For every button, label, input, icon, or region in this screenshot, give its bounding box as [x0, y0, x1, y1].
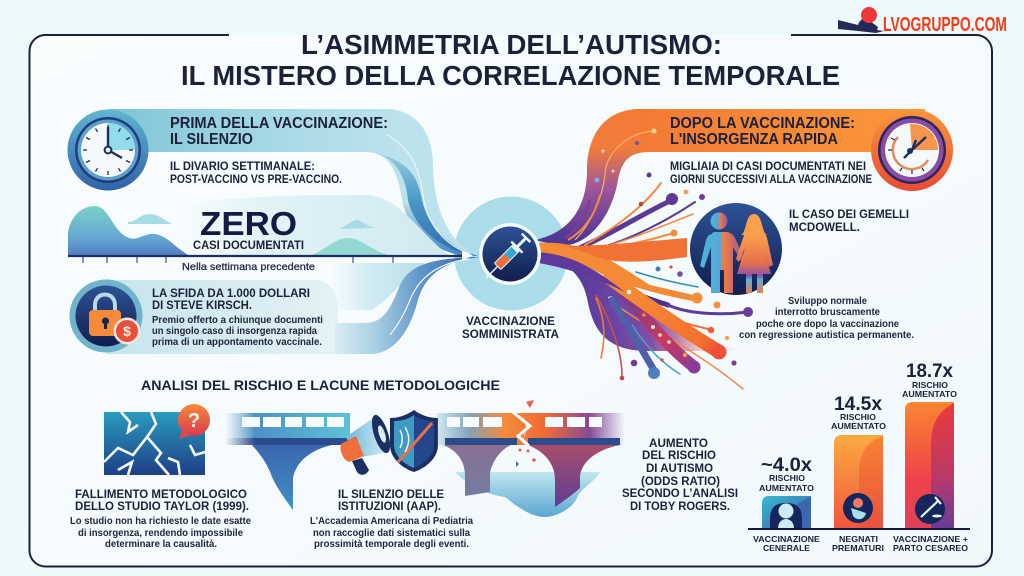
logo: ilvogruppo.com: [838, 7, 1007, 36]
thousands of cases text: MIGLIAIA DI CASI DOCUMENTATI NEI: [670, 161, 866, 173]
bar: general vaccination 4.0x: ~4.0x: [761, 455, 812, 476]
illustration: intact bridge: [225, 413, 350, 510]
text block: Taylor study: DELLO STUDIO TAYLOR (1999).: [75, 499, 249, 513]
bar: premature newborns 14.5x: AUMENTATO: [831, 421, 886, 431]
text block: risk increase: AUMENTO: [649, 436, 708, 450]
thousands of cases text: [670, 161, 872, 186]
bar: premature newborns 14.5x: RISCHIO: [840, 412, 876, 422]
icon: lock and dollar: $: [123, 323, 131, 339]
before heading: [170, 115, 388, 148]
text block: risk increase: SECONDO L’ANALISI: [622, 486, 738, 500]
bar category labels: VACCINAZIONE: [753, 534, 820, 544]
twins heading: MCDOWELL.: [789, 222, 860, 234]
challenge text: [152, 288, 323, 348]
text block: AAP silence: prossimità temporale degli eventi.: [314, 539, 469, 550]
icon: cracked study tile: ?: [188, 410, 200, 432]
before heading: PRIMA DELLA VACCINAZIONE:: [170, 115, 388, 132]
text block: Taylor study: di insorgenza, rendendo impossibile: [78, 528, 243, 539]
bar: vaccination plus caesarean 18.7x: RISCHIO: [912, 380, 948, 390]
text block: Taylor study: determinare la causalità.: [105, 539, 217, 550]
twins description: con regressione autistica permanente.: [739, 330, 914, 341]
zero cases figure: CASI DOCUMENTATI: [193, 238, 304, 252]
text block: AAP silence: L'Accademia Americana di Pediatria: [310, 516, 473, 527]
challenge text: un singolo caso di insorgenza rapida: [152, 326, 317, 337]
bar category labels: [753, 534, 968, 553]
bar category labels: PREMATURI: [832, 543, 884, 553]
after heading: DOPO LA VACCINAZIONE:: [670, 115, 855, 132]
weekly gap text: IL DIVARIO SETTIMANALE:: [170, 161, 315, 173]
twins heading: [789, 209, 909, 234]
bar: general vaccination 4.0x: [759, 455, 814, 529]
icon: McDowell twins: [690, 203, 782, 295]
weekly gap text: [170, 161, 342, 186]
vaccination label: [462, 316, 559, 341]
text block: risk increase: DEL RISCHIO: [642, 448, 716, 462]
panel: before vaccination stream: [108, 109, 478, 256]
bar chart: odds ratio: [748, 361, 970, 553]
bar: vaccination plus caesarean 18.7x: 18.7x: [906, 361, 953, 382]
bar category labels: VACCINAZIONE +: [893, 534, 968, 544]
challenge text: Premio offerto a chiunque documenti: [152, 315, 323, 326]
before heading: IL SILENZIO: [170, 131, 253, 148]
bar: general vaccination 4.0x: RISCHIO: [769, 473, 805, 483]
bar: premature newborns 14.5x: 14.5x: [834, 394, 882, 415]
text block: AAP silence: IL SILENZIO DELLE: [338, 487, 444, 501]
zero cases figure: Nella settimana precedente: [182, 261, 315, 273]
panel: after vaccination stream: [535, 109, 925, 246]
central vaccination node: [479, 223, 541, 285]
icon: lock and dollar: [70, 280, 142, 352]
text block: risk increase: (ODDS RATIO): [641, 474, 720, 488]
after heading: L'INSORGENZA RAPIDA: [670, 131, 838, 148]
illustration: broken bridge: [437, 400, 625, 517]
zero cases figure: [182, 205, 315, 273]
text block: Taylor study: [70, 487, 251, 550]
text block: Taylor study: Lo studio non ha richiesto le date esatte: [70, 516, 251, 527]
zero cases figure: ZERO: [200, 205, 297, 242]
icon: megaphone and shield: [340, 410, 438, 475]
text block: risk increase: [622, 436, 738, 513]
panel: Kirsch challenge: [106, 257, 480, 354]
twins description: [739, 296, 914, 341]
vaccination label: VACCINAZIONE: [466, 316, 555, 328]
title: [181, 29, 840, 91]
title: IL MISTERO DELLA CORRELAZIONE TEMPORALE: [181, 60, 840, 91]
icon: clock before: [68, 110, 148, 190]
twins heading: IL CASO DEI GEMELLI: [789, 209, 909, 221]
challenge text: LA SFIDA DA 1.000 DOLLARI: [152, 288, 310, 300]
challenge text: DI STEVE KIRSCH.: [152, 300, 252, 312]
bar: vaccination plus caesarean 18.7x: AUMENTATO: [902, 389, 957, 399]
bar category labels: NEGNATI: [839, 534, 878, 544]
challenge text: prima di un appontamento vaccinale.: [152, 337, 322, 348]
vaccination label: SOMMINISTRATA: [462, 329, 559, 341]
bar: premature newborns 14.5x: [831, 394, 886, 529]
chart: timeline landscape: [68, 195, 470, 310]
central halo: [454, 196, 568, 310]
section heading: risk analysis: ANALISI DEL RISCHIO E LACUNE METODOLOGICHE: [141, 377, 500, 393]
after heading: [670, 115, 855, 148]
twins description: Sviluppo normale: [788, 296, 867, 307]
weekly gap text: POST-VACCINO VS PRE-VACCINO.: [170, 174, 342, 186]
arrow head: [462, 250, 473, 261]
twins description: interrotto bruscamente: [775, 307, 880, 318]
icon: cracked study tile: [104, 404, 210, 475]
title: L’ASIMMETRIA DELL’AUTISMO:: [301, 29, 722, 60]
thousands of cases text: GIORNI SUCCESSIVI ALLA VACCINAZIONE: [670, 174, 872, 186]
twins description: poche ore dopo la vaccinazione: [756, 319, 899, 330]
burst of coloured streams: [538, 172, 753, 389]
bar: vaccination plus caesarean 18.7x: [902, 361, 957, 529]
text block: risk increase: DI AUTISMO: [646, 461, 713, 475]
bar category labels: CENERALE: [763, 543, 810, 553]
text block: Taylor study: FALLIMENTO METODOLOGICO: [75, 487, 247, 501]
text block: AAP silence: ISTITUZIONI (AAP).: [338, 499, 441, 513]
text block: AAP silence: [310, 487, 473, 550]
icon: clock after: [871, 109, 953, 191]
text block: risk increase: DI TOBY ROGERS.: [630, 499, 730, 513]
bar category labels: PARTO CESAREO: [893, 543, 968, 553]
text block: AAP silence: non raccoglie dati sistematici sulla: [313, 528, 470, 539]
icon: syringe: [480, 231, 533, 284]
bar: general vaccination 4.0x: AUMENTATO: [759, 483, 814, 493]
